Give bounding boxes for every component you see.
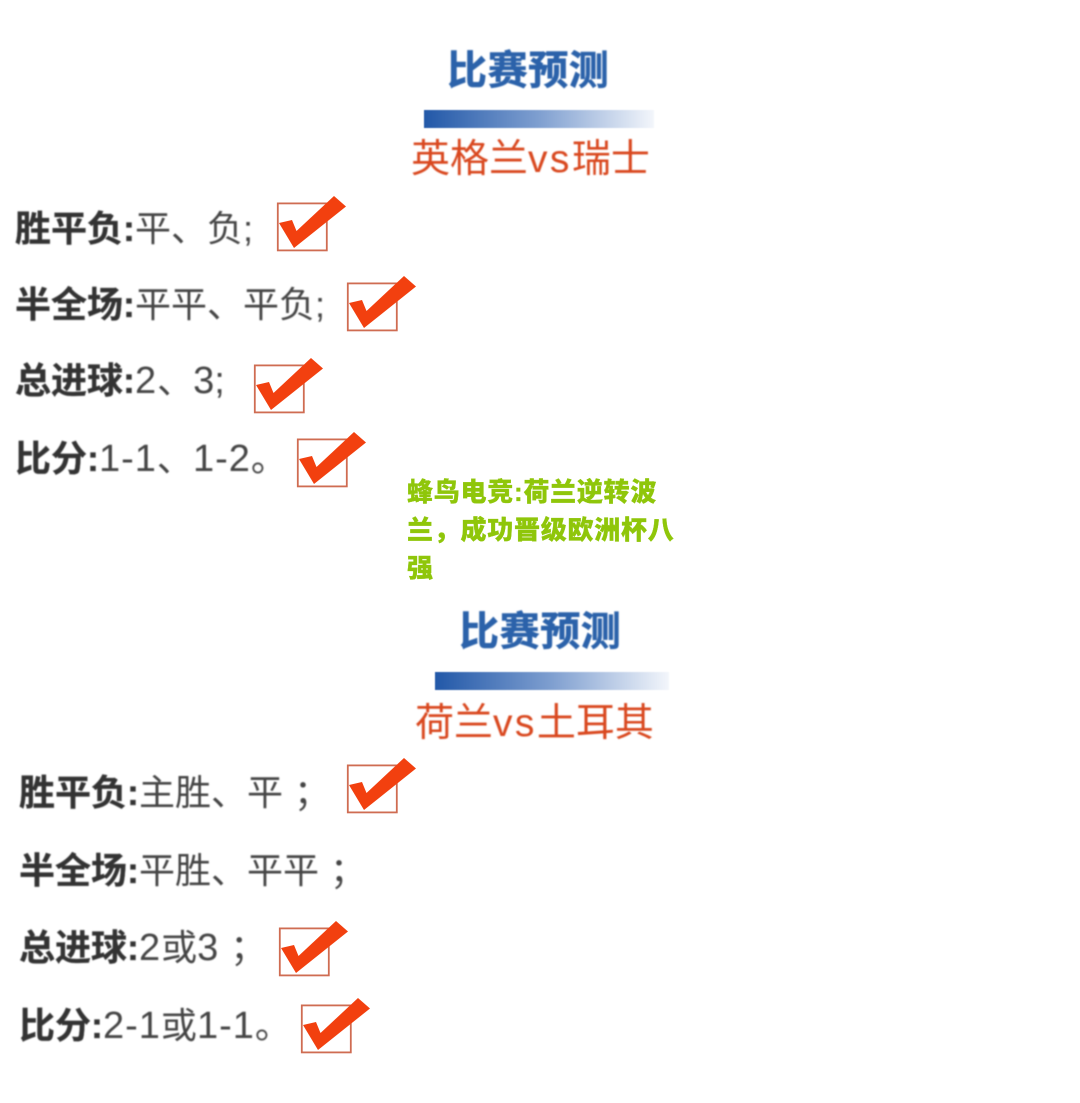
icon: checkbox 2 — [346, 276, 416, 332]
icon: checkbox 4 — [296, 432, 366, 488]
row: half full time: 半全场:平胜、平平 ； — [19, 850, 366, 891]
icon: checkbox 1 — [276, 196, 346, 252]
headline: 蜂鸟电竞:荷兰逆转波兰，成功晋级欧洲杯八强 — [407, 477, 675, 583]
icon: checkbox 5 — [346, 758, 416, 814]
icon: checkbox 6 — [278, 921, 348, 976]
gradient bar: first prediction — [424, 110, 654, 128]
row: win draw lose: 胜平负:平、负; — [15, 208, 253, 249]
row: total goals: 总进球:2、3; — [15, 360, 225, 402]
icon: checkbox 7 — [300, 998, 370, 1054]
row: win draw lose: 胜平负:主胜、平 ； — [19, 772, 330, 813]
row: score: 比分:2-1或1-1。 — [19, 1005, 291, 1047]
match title: England vs Switzerland: 英格兰vs瑞士 — [411, 138, 650, 181]
heading: first prediction: 比赛预测 — [447, 49, 609, 93]
row: score: 比分:1-1、1-2。 — [15, 438, 287, 480]
heading: second prediction: 比赛预测 — [459, 610, 621, 654]
gradient bar: second prediction — [435, 672, 669, 690]
icon: checkbox 3 — [254, 358, 323, 414]
row: total goals: 总进球:2或3 ； — [19, 927, 266, 969]
row: half full time: 半全场:平平、平负; — [15, 284, 325, 325]
match title: Netherlands vs Turkey: 荷兰vs土耳其 — [415, 702, 654, 745]
